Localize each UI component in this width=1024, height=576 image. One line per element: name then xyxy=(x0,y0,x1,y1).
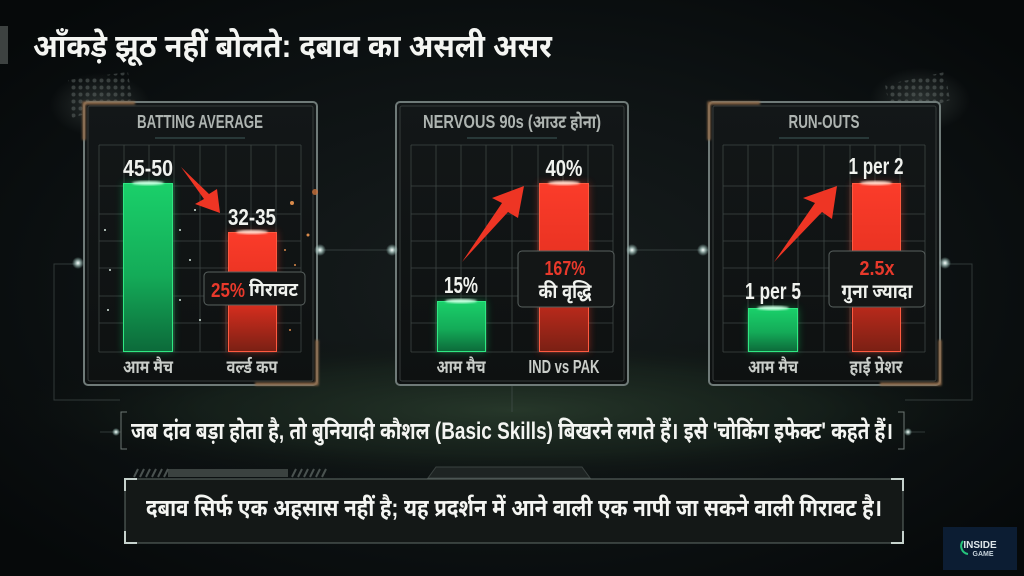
callout: 25% गिरावट: गिरावट xyxy=(249,279,299,301)
panel heading: BATTING AVERAGE xyxy=(137,112,263,132)
arrow: up xyxy=(774,186,837,262)
callout: 2.5x गुना ज्यादा xyxy=(829,251,925,307)
glowing connector nodes xyxy=(72,244,951,436)
panel heading: RUN-OUTS xyxy=(788,112,860,132)
value: 45-50: 45-50 xyxy=(123,155,173,181)
value: 1 per 5: 1 per 5 xyxy=(745,278,801,304)
panel: nervous 90s xyxy=(396,102,628,385)
chart grid xyxy=(411,145,613,352)
label: वर्ल्ड कप: वर्ल्ड कप xyxy=(226,356,278,377)
label: आम मैच: आम मैच xyxy=(123,356,173,377)
chart grid xyxy=(723,145,925,352)
label: IND vs PAK: IND vs PAK xyxy=(528,357,600,377)
panel: run-outs xyxy=(709,102,940,385)
logo: inside game: INSIDE xyxy=(963,540,997,551)
callout: 167% की वृद्धि: की वृद्धि xyxy=(538,279,592,304)
decorative hatch and plate behind conclusion xyxy=(134,467,590,478)
callout: 25% गिरावट xyxy=(204,272,305,305)
label: आम मैच: आम मैच xyxy=(748,356,798,377)
callout: 25% गिरावट: 25% xyxy=(211,280,245,302)
label: आम मैच: आम मैच xyxy=(436,356,486,377)
value: 40%: 40% xyxy=(546,155,582,181)
callout: 2.5x गुना ज्यादा: 2.5x xyxy=(860,258,894,280)
panel: conclusion xyxy=(125,479,903,543)
bar: हाई प्रेशर xyxy=(852,181,901,352)
arrow: down xyxy=(181,167,220,213)
title: आँकड़े झूठ नहीं बोलते: दबाव का असली असर xyxy=(33,27,553,66)
bar: आम मैच xyxy=(748,306,798,352)
sparks xyxy=(104,189,318,331)
label: हाई प्रेशर: हाई प्रेशर xyxy=(850,356,903,377)
logo: inside game xyxy=(943,527,1017,570)
value: 1 per 2: 1 per 2 xyxy=(848,153,904,179)
value: 15%: 15% xyxy=(444,272,478,298)
chart grid xyxy=(99,145,301,352)
connector lines between panels xyxy=(54,250,972,432)
bar: आम मैच xyxy=(123,181,173,352)
callout: 167% की वृद्धि: 167% xyxy=(544,258,586,280)
panel: conclusion: दबाव सिर्फ एक अहसास नहीं है; यह प्रदर्शन में आने वाली एक नापी जा सकने वाली गिरावट है। xyxy=(146,494,882,522)
text block: choking effect xyxy=(121,412,904,449)
value: 32-35: 32-35 xyxy=(228,204,276,230)
bar: आम मैच xyxy=(437,299,486,352)
bar: IND vs PAK xyxy=(539,181,589,352)
logo: inside game: GAME xyxy=(972,551,994,558)
callout: 167% की वृद्धि xyxy=(518,251,614,307)
panel heading: NERVOUS 90s (आउट होना) xyxy=(423,112,601,132)
arrow: up xyxy=(462,186,524,262)
callout: 2.5x गुना ज्यादा: गुना ज्यादा xyxy=(842,281,913,304)
panel: batting average xyxy=(84,102,318,385)
bar: वर्ल्ड कप xyxy=(228,230,277,352)
